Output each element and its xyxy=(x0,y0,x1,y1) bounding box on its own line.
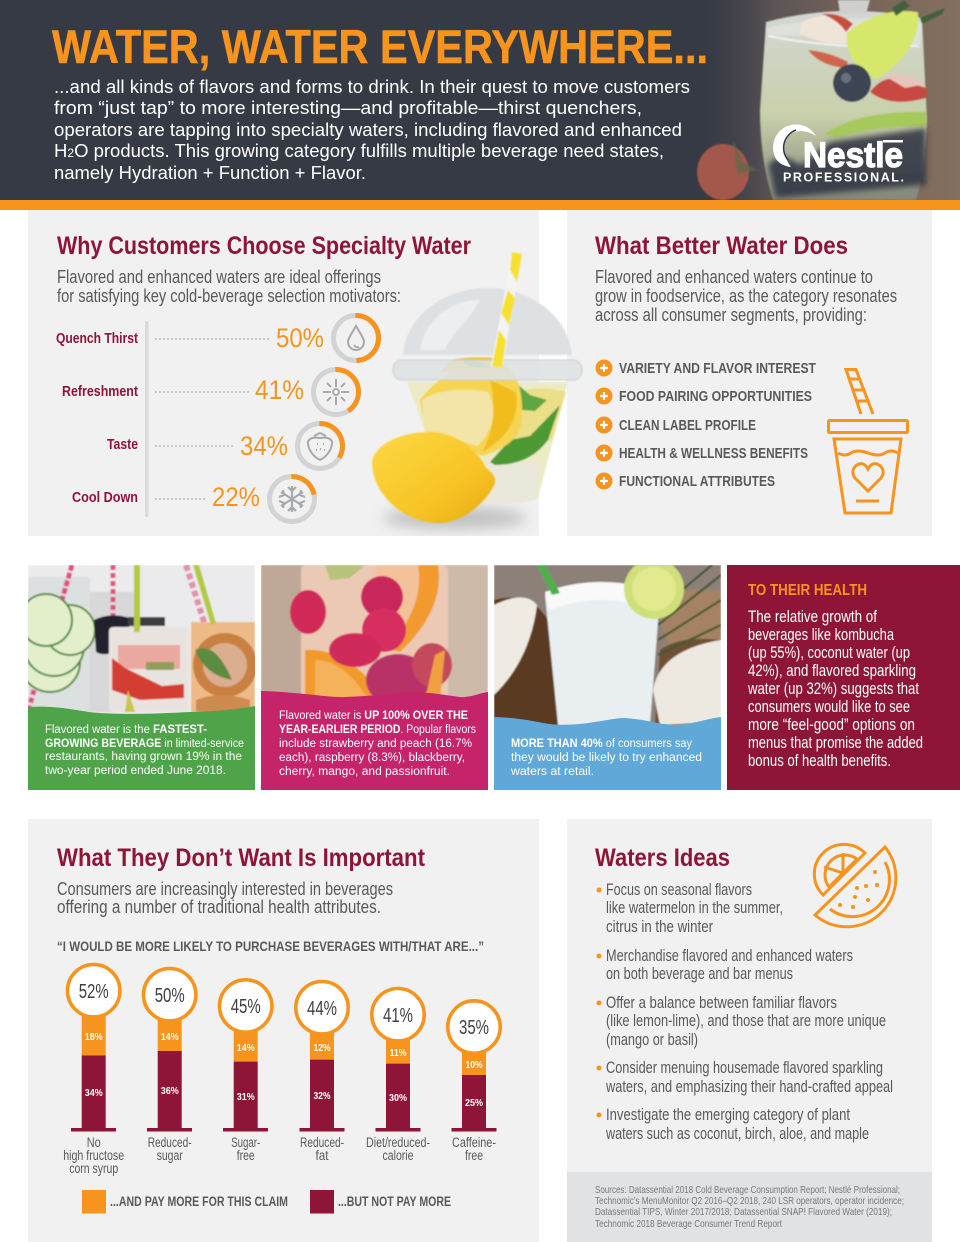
card text: waters at retail. xyxy=(510,766,594,778)
row: taste 34%: 34% xyxy=(240,431,288,461)
card text: each), raspberry (8.3%), blackberry, xyxy=(279,752,465,764)
header intro text: H2O products. This growing category fulfills multiple beverage need states, xyxy=(54,140,664,161)
row: quench thirst 50%: 50% xyxy=(276,323,324,353)
panel: to their health xyxy=(727,565,960,790)
body text: (up 55%), coconut water (up xyxy=(748,644,910,662)
bar: reduced-sugar: Reduced- xyxy=(148,1135,192,1150)
icon: cup with heart xyxy=(828,370,908,513)
header photo: sparkling fruit water glass xyxy=(690,0,960,200)
row: taste 34% xyxy=(107,424,342,468)
benefit list: FUNCTIONAL ATTRIBUTES xyxy=(619,474,775,490)
bar: reduced-sugar: 36% xyxy=(161,1085,179,1097)
logo: Nestlé Professional: PROFESSIONAL. xyxy=(783,170,904,184)
row: cool down 22%: Cool Down xyxy=(72,490,138,506)
legend xyxy=(82,1190,451,1214)
legend: ...AND PAY MORE FOR THIS CLAIM xyxy=(110,1194,288,1209)
body text: bonus of health benefits. xyxy=(748,752,891,770)
bar: caffeine-free: 25% xyxy=(465,1097,484,1109)
benefit list: HEALTH & WELLNESS BENEFITS xyxy=(619,446,808,462)
icon: sun xyxy=(323,379,349,405)
bar: sugar-free: Sugar- xyxy=(231,1135,260,1150)
icon: strawberry xyxy=(308,433,332,460)
card text: Flavored water is the FASTEST- xyxy=(45,724,207,736)
body text: more “feel-good” options on xyxy=(748,716,915,734)
bar: caffeine-free xyxy=(448,1001,500,1163)
idea list: Offer a balance between familiar flavors xyxy=(606,994,837,1012)
intro text: Flavored and enhanced waters are ideal offerings xyxy=(57,267,381,287)
panel: waters ideas xyxy=(567,819,932,1172)
idea list: Merchandise flavored and enhanced waters xyxy=(606,947,853,965)
heading: Why Customers Choose Specialty Water xyxy=(57,232,471,260)
bar: reduced-sugar xyxy=(144,968,196,1163)
bar: reduced-fat: Reduced- xyxy=(300,1135,344,1150)
idea list: waters such as coconut, birch, aloe, and maple xyxy=(605,1125,869,1143)
intro text: Consumers are increasingly interested in beverages xyxy=(57,879,393,899)
heading: TO THEIR HEALTH xyxy=(748,582,867,599)
header intro text: operators are tapping into specialty waters, including flavored and enhanced xyxy=(54,119,682,140)
bar: no high fructose corn syrup: 52% xyxy=(79,981,109,1003)
icon: snowflake xyxy=(279,486,305,512)
bar: reduced-fat xyxy=(296,982,348,1163)
body text: beverages like kombucha xyxy=(748,626,895,644)
bar: caffeine-free: 35% xyxy=(459,1017,489,1039)
photo: coconut water glass xyxy=(494,559,721,730)
panel: what they don't want is important xyxy=(28,819,539,1242)
bar: no high fructose corn syrup: high fructose xyxy=(63,1148,124,1163)
card: more than 40% of consumers xyxy=(494,559,721,790)
intro text: for satisfying key cold-beverage selection motivators: xyxy=(57,286,401,306)
bar: reduced-fat: fat xyxy=(316,1148,329,1163)
idea list: (mango or basil) xyxy=(606,1031,698,1049)
card: fastest-growing beverage xyxy=(20,565,257,790)
benefit list xyxy=(596,360,816,490)
header intro text xyxy=(54,76,690,183)
card: up 100% over the year-earlier period xyxy=(261,565,488,790)
intro text: Flavored and enhanced waters continue to xyxy=(595,267,873,287)
card text xyxy=(510,738,702,778)
heading: Waters Ideas xyxy=(595,844,730,872)
card text: Flavored water is UP 100% OVER THE xyxy=(279,710,468,722)
body text: water (up 32%) suggests that xyxy=(747,680,919,698)
idea list: Focus on seasonal flavors xyxy=(606,881,752,899)
row: cool down 22% xyxy=(72,476,314,522)
header intro text: from “just tap” to more interesting—and profitable—thirst quenchers, xyxy=(54,97,642,118)
row: refreshment 41%: 41% xyxy=(255,375,304,405)
bar: diet/reduced-calorie: calorie xyxy=(382,1148,414,1163)
row: cool down 22%: 22% xyxy=(212,482,260,512)
panel: sources: Technomic 2018 Beverage Consumer Trend Report xyxy=(595,1218,782,1230)
card text: restaurants, having grown 19% in the xyxy=(45,751,242,763)
intro text: across all consumer segments, providing: xyxy=(595,305,867,325)
card text xyxy=(279,710,476,778)
bar: diet/reduced-calorie: Diet/reduced- xyxy=(366,1135,430,1150)
intro text xyxy=(57,267,401,306)
bar: reduced-sugar: sugar xyxy=(157,1148,183,1163)
bar: diet/reduced-calorie: 41% xyxy=(383,1005,413,1027)
row: quench thirst 50%: Quench Thirst xyxy=(56,331,138,347)
lemon xyxy=(372,432,495,523)
logo: Nestlé Professional: Nestle xyxy=(803,136,903,175)
chart question: “I WOULD BE MORE LIKELY TO PURCHASE BEVERAGES WITH/THAT ARE...” xyxy=(57,938,484,954)
bar: no high fructose corn syrup: 18% xyxy=(85,1031,103,1043)
bar: no high fructose corn syrup: corn syrup xyxy=(69,1161,118,1176)
bar: sugar-free: 45% xyxy=(231,996,261,1018)
bar: sugar-free xyxy=(220,980,272,1163)
orange header rule xyxy=(0,200,960,210)
row: refreshment 41% xyxy=(62,370,358,414)
bar: caffeine-free: Caffeine- xyxy=(452,1135,496,1150)
header intro text: namely Hydration + Function + Flavor. xyxy=(54,162,366,183)
body text: consumers would like to see xyxy=(748,698,910,716)
header intro text: ...and all kinds of flavors and forms to drink. In their quest to move customers xyxy=(54,76,690,97)
idea list: on both beverage and bar menus xyxy=(606,965,793,983)
bar: reduced-sugar: 14% xyxy=(161,1031,179,1043)
card text: they would be likely to try enhanced xyxy=(511,752,702,764)
card text: two-year period ended June 2018. xyxy=(45,765,226,777)
bar: no high fructose corn syrup xyxy=(63,964,124,1176)
card text: YEAR-EARLIER PERIOD. Popular flavors xyxy=(279,724,476,736)
bar: reduced-fat: 44% xyxy=(307,998,337,1020)
body text xyxy=(747,608,923,770)
legend: ...BUT NOT PAY MORE xyxy=(338,1194,451,1209)
benefit list: VARIETY AND FLAVOR INTEREST xyxy=(619,361,816,377)
card text: include strawberry and peach (16.7% xyxy=(279,738,472,750)
heading: What They Don’t Want Is Important xyxy=(57,844,426,872)
photo: lemonade cup with lemon xyxy=(372,252,582,529)
intro text xyxy=(595,267,897,325)
bar: caffeine-free: free xyxy=(465,1148,483,1163)
intro text: offering a number of traditional health attributes. xyxy=(57,897,381,917)
logo: Nestlé Professional xyxy=(773,124,904,184)
card text xyxy=(45,724,244,777)
row: taste 34%: Taste xyxy=(107,437,138,453)
idea list: Consider menuing housemade flavored sparkling xyxy=(606,1059,883,1077)
bar: sugar-free: 31% xyxy=(237,1091,255,1103)
heading: What Better Water Does xyxy=(595,232,848,260)
photo: fruit-infused jar xyxy=(261,565,488,706)
idea list xyxy=(596,881,893,1143)
bar: reduced-sugar: 50% xyxy=(155,985,185,1007)
idea list: like watermelon in the summer, xyxy=(606,899,783,917)
bar: diet/reduced-calorie: 30% xyxy=(389,1092,408,1104)
bar chart xyxy=(63,964,500,1176)
bar: sugar-free: free xyxy=(237,1148,255,1163)
photo: infused water glasses xyxy=(20,565,257,715)
benefit list: CLEAN LABEL PROFILE xyxy=(619,418,756,434)
panel: why customers choose specialty water xyxy=(28,210,539,536)
bar: no high fructose corn syrup: No xyxy=(87,1135,101,1150)
icon: water drop xyxy=(348,326,364,350)
idea list: citrus in the winter xyxy=(606,918,713,936)
row: refreshment 41%: Refreshment xyxy=(62,384,138,400)
benefit list: FOOD PAIRING OPPORTUNITIES xyxy=(619,389,812,405)
bar: diet/reduced-calorie xyxy=(366,988,430,1163)
body text: 42%), and flavored sparkling xyxy=(748,662,916,680)
row: quench thirst 50% xyxy=(56,316,378,360)
bar: reduced-fat: 32% xyxy=(314,1090,331,1102)
card text: GROWING BEVERAGE in limited-service xyxy=(45,738,244,750)
title: WATER, WATER EVERYWHERE... xyxy=(52,20,708,73)
header banner xyxy=(0,0,960,200)
bar: caffeine-free: 10% xyxy=(466,1059,483,1071)
card text: cherry, mango, and passionfruit. xyxy=(279,766,450,778)
icon: citrus and watermelon slices xyxy=(814,844,896,927)
bar: reduced-fat: 12% xyxy=(314,1042,331,1054)
idea list: (like lemon-lime), and those that are more unique xyxy=(606,1012,886,1030)
card text: MORE THAN 40% of consumers say xyxy=(511,738,692,750)
idea list: Investigate the emerging category of plant xyxy=(606,1106,850,1124)
panel: sources xyxy=(567,1172,932,1242)
intro text xyxy=(57,879,393,917)
bar: no high fructose corn syrup: 34% xyxy=(85,1087,103,1099)
bar: diet/reduced-calorie: 11% xyxy=(390,1047,407,1059)
intro text: grow in foodservice, as the category resonates xyxy=(595,286,897,306)
bar: sugar-free: 14% xyxy=(237,1042,255,1054)
panel: what better water does xyxy=(567,210,932,536)
body text: The relative growth of xyxy=(748,608,877,626)
